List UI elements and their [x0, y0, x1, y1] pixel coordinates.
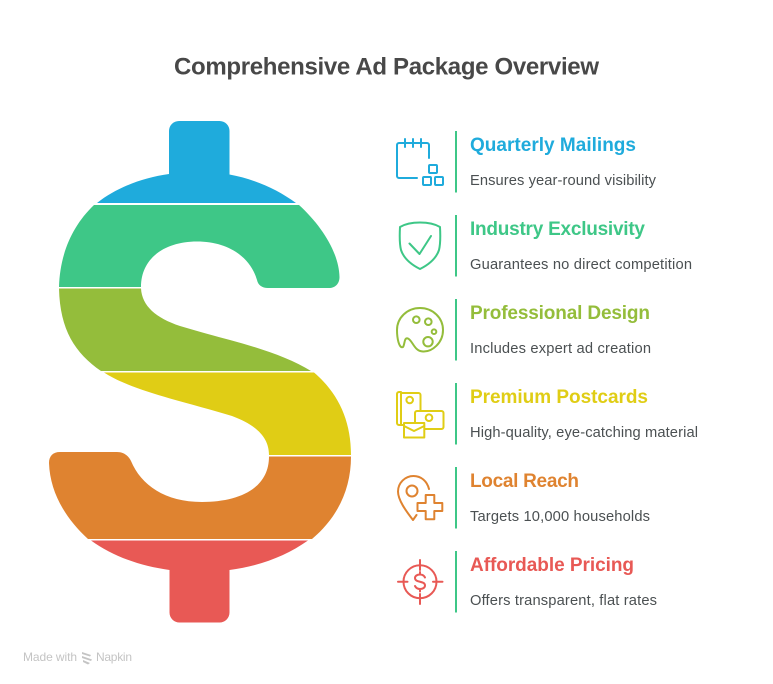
segment: affordable pricing — [91, 540, 308, 622]
divider — [455, 131, 457, 192]
divider — [455, 383, 457, 444]
description: Includes expert ad creation — [470, 341, 651, 357]
icon: dollar target — [398, 560, 442, 604]
segment: industry exclusivity — [59, 205, 340, 288]
icon: map pin with plus — [398, 476, 442, 520]
dollar sign chart — [49, 121, 351, 622]
heading: Affordable Pricing — [470, 555, 634, 576]
segment: professional design — [59, 288, 311, 371]
segment: premium postcards — [104, 372, 351, 455]
icon: shield with check — [400, 222, 440, 269]
footer: made with napkin — [23, 650, 132, 664]
description: Targets 10,000 households — [470, 509, 650, 525]
icon: postcards and envelope — [397, 392, 444, 438]
icon: paint palette — [397, 308, 443, 352]
description: Offers transparent, flat rates — [470, 593, 657, 609]
item: industry exclusivity — [400, 215, 692, 276]
segment: quarterly mailings — [97, 121, 296, 203]
heading: Professional Design — [470, 303, 650, 324]
footer: made with napkin: Made with — [23, 650, 77, 664]
item: quarterly mailings — [397, 131, 657, 192]
divider — [455, 215, 457, 276]
title: Comprehensive Ad Package Overview — [174, 53, 599, 80]
item: professional design — [397, 299, 651, 360]
footer: made with napkin: Napkin — [96, 650, 132, 664]
item: local reach — [398, 467, 650, 528]
description: Guarantees no direct competition — [470, 257, 692, 273]
description: High-quality, eye-catching material — [470, 425, 698, 441]
divider — [455, 551, 457, 612]
description: Ensures year-round visibility — [470, 173, 657, 189]
item: premium postcards — [397, 383, 698, 444]
divider — [455, 299, 457, 360]
heading: Quarterly Mailings — [470, 135, 636, 156]
item: affordable pricing — [398, 551, 657, 612]
heading: Industry Exclusivity — [470, 219, 645, 240]
segment: local reach — [49, 452, 351, 539]
heading: Premium Postcards — [470, 387, 648, 408]
icon: calendar with squares — [397, 139, 443, 185]
icon: napkin logo — [82, 652, 92, 664]
divider — [455, 467, 457, 528]
heading: Local Reach — [470, 471, 579, 492]
